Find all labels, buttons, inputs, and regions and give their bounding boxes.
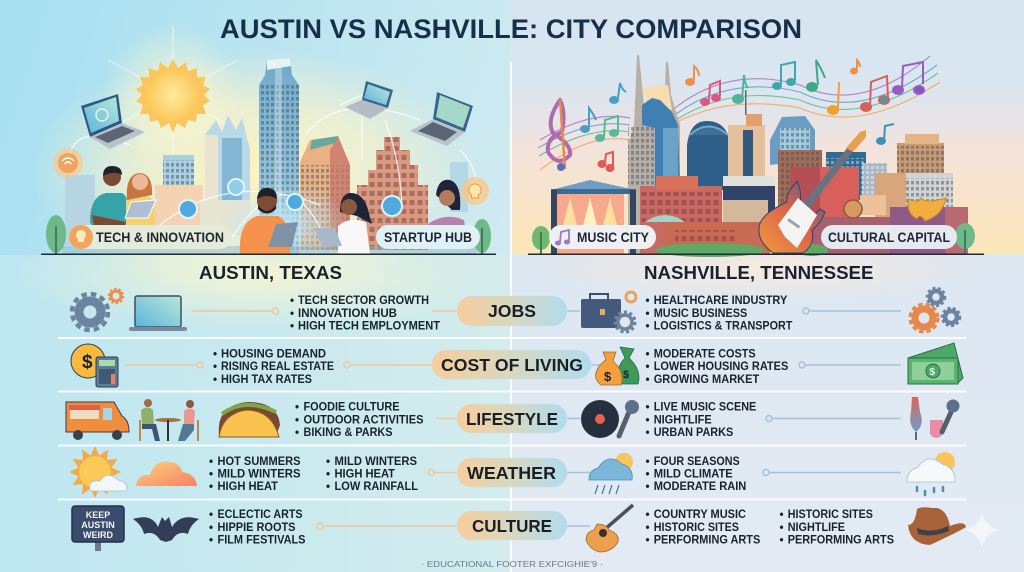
icon: acoustic guitar — [586, 505, 633, 552]
Austin cost of living list: HOUSING DEMAND — [221, 348, 326, 360]
tan tower — [728, 90, 765, 185]
Austin cost of living list: • — [213, 373, 217, 386]
icon: coin and calculator: $ — [82, 352, 93, 373]
person: man in teal shirt — [90, 166, 128, 228]
Nashville culture list two — [780, 508, 894, 546]
Austin jobs list: HIGH TECH EMPLOYMENT — [298, 320, 440, 332]
Austin lifestyle list — [295, 400, 424, 439]
Nashville jobs list: MUSIC BUSINESS — [654, 307, 748, 320]
Nashville jobs list: HEALTHCARE INDUSTRY — [654, 294, 788, 307]
icon: vinyl record and microphone — [581, 400, 639, 438]
pill: Jobs: JOBS — [488, 301, 536, 321]
Nashville culture list two: • — [780, 508, 784, 521]
concert stage — [551, 180, 636, 254]
icon: treble clef — [548, 100, 570, 171]
Austin weather list two: • — [326, 455, 330, 468]
Austin weather list two: • — [326, 480, 330, 493]
icon: Keep Austin Weird sign — [72, 506, 124, 551]
Nashville weather list: • — [646, 480, 650, 493]
tree right — [955, 223, 975, 254]
ground tint — [62, 246, 477, 254]
Austin culture list — [209, 508, 306, 546]
Nashville jobs list: • — [646, 307, 650, 320]
Austin jobs list: INNOVATION HUB — [298, 307, 397, 320]
dome building — [687, 121, 730, 190]
pill: Music City — [549, 225, 656, 249]
Austin jobs list: • — [290, 307, 294, 320]
panel: Austin skyline illustration — [46, 25, 491, 267]
Nashville lifestyle list: LIVE MUSIC SCENE — [654, 400, 757, 414]
Nashville cost of living list: • — [646, 360, 650, 373]
tall tan building — [897, 134, 944, 185]
network arcs — [68, 95, 477, 240]
peach office building — [300, 136, 350, 250]
background: Nashville sky — [511, 60, 1024, 254]
icon: three gears — [910, 288, 960, 332]
Nashville culture list two: NIGHTLIFE — [788, 521, 845, 534]
Nashville culture list two: HISTORIC SITES — [788, 508, 873, 521]
Nashville weather list — [646, 455, 746, 493]
Austin culture list: • — [209, 508, 213, 521]
Austin cost of living list: • — [213, 348, 217, 360]
tan low buildings — [860, 173, 953, 223]
icon: money bags: $ — [604, 369, 612, 384]
pill: Culture: CULTURE — [472, 516, 552, 536]
background: Nashville side — [511, 0, 1024, 572]
icon: rain cloud with sun — [589, 453, 633, 494]
connectors: Nashville side — [567, 308, 901, 526]
person: woman in pink top — [428, 180, 466, 232]
heading: Nashville, Tennessee: NASHVILLE, TENNESSEE — [644, 262, 874, 283]
background: Nashville heading glow — [530, 232, 990, 304]
pill: Lifestyle — [457, 404, 567, 433]
Austin jobs list: • — [290, 294, 294, 307]
person: woman in white blouse — [314, 193, 372, 254]
shrubs — [655, 243, 828, 257]
Austin weather list two: HIGH HEAT — [334, 468, 395, 480]
person: woman with tablet — [125, 173, 156, 226]
Nashville cost of living list: GROWING MARKET — [654, 373, 759, 386]
footer: · EDUCATIONAL FOOTER EXFCIGHIE'9 · — [421, 559, 603, 569]
Austin lifestyle list: • — [295, 400, 299, 414]
icon: coin and calculator — [71, 344, 118, 387]
glow behind network — [220, 183, 350, 267]
Austin weather list two — [326, 455, 418, 493]
Austin weather list one: MILD WINTERS — [218, 468, 301, 480]
icon: mask — [908, 198, 946, 221]
Austin culture list: ECLECTIC ARTS — [218, 508, 303, 521]
Austin weather list two: • — [326, 468, 330, 480]
connectors: Austin side — [125, 308, 457, 529]
pill: Tech & Innovation: TECH & INNOVATION — [96, 230, 224, 245]
brown building — [778, 150, 822, 215]
Nashville weather list: FOUR SEASONS — [654, 455, 740, 468]
Nashville lifestyle list: URBAN PARKS — [654, 426, 734, 439]
pill: Weather — [457, 458, 567, 487]
Nashville culture list two: PERFORMING ARTS — [788, 534, 894, 546]
Batman building — [628, 55, 680, 254]
title: AUSTIN VS NASHVILLE: CITY COMPARISON — [220, 14, 802, 44]
Nashville weather list: • — [646, 455, 650, 468]
sparkle — [964, 512, 1000, 548]
pill: Cultural Capital — [821, 225, 957, 249]
icon: glasses and microphone — [910, 397, 960, 440]
Austin cost of living list: • — [213, 360, 217, 373]
icon: food truck — [66, 402, 129, 440]
Nashville culture list one: HISTORIC SITES — [654, 521, 739, 534]
Nashville cost of living list: MODERATE COSTS — [654, 348, 756, 360]
Nashville jobs list: • — [646, 320, 650, 332]
icon: money bags: $ — [623, 369, 629, 381]
panel: Nashville skyline illustration — [532, 55, 975, 257]
Austin lifestyle list: OUTDOOR ACTIVITIES — [304, 414, 424, 426]
icon: laptop far right — [410, 92, 473, 146]
Austin cost of living list: RISING REAL ESTATE — [221, 360, 334, 373]
red brick buildings — [640, 167, 968, 254]
icon: cafe table with two people — [139, 399, 199, 441]
Nashville lifestyle list: • — [646, 426, 650, 439]
icon: orange cloud — [136, 462, 197, 486]
pill: Tech & Innovation — [69, 225, 232, 249]
Austin lifestyle list: FOODIE CULTURE — [304, 400, 400, 414]
Austin cost of living list: HIGH TAX RATES — [221, 373, 312, 386]
stepped brick building — [357, 137, 428, 250]
Nashville lifestyle list: • — [646, 400, 650, 414]
Austin cost of living list — [213, 348, 334, 386]
Austin weather list two: MILD WINTERS — [334, 455, 417, 468]
icon: sun — [103, 25, 243, 165]
pill: Startup Hub: STARTUP HUB — [384, 230, 472, 245]
music notes — [581, 60, 924, 171]
Nashville cost of living list: • — [646, 373, 650, 386]
Nashville culture list two: • — [780, 534, 784, 546]
Nashville weather list: MILD CLIMATE — [654, 468, 733, 480]
Nashville cost of living list — [646, 348, 789, 386]
Nashville culture list one: • — [646, 534, 650, 546]
pill: Music City: MUSIC CITY — [577, 230, 649, 245]
icon: gears — [72, 289, 123, 330]
icon: bat — [133, 517, 199, 542]
Nashville jobs list: LOGISTICS & TRANSPORT — [654, 320, 792, 332]
icon: laptop top right — [345, 81, 393, 119]
Austin weather list one: HIGH HEAT — [218, 480, 278, 493]
icon: money bags — [596, 347, 639, 385]
Austin weather list one: • — [209, 455, 213, 468]
Nashville weather list: • — [646, 468, 650, 480]
heading: Austin, Texas: AUSTIN, TEXAS — [199, 262, 342, 283]
grey building — [862, 163, 887, 203]
background buildings — [65, 115, 468, 245]
icon: stack of cash — [908, 343, 963, 384]
Austin weather list two: LOW RAINFALL — [334, 480, 418, 493]
Austin culture list: HIPPIE ROOTS — [218, 521, 296, 534]
icon: briefcase with gear — [581, 292, 636, 332]
pill: Lifestyle: LIFESTYLE — [466, 409, 558, 429]
icon: taco — [219, 402, 280, 437]
icon: film reel — [844, 200, 862, 218]
person: man in orange shirt — [240, 188, 298, 254]
tower — [259, 58, 299, 254]
pill: Cultural Capital: CULTURAL CAPITAL — [828, 230, 950, 245]
Austin weather list one: • — [209, 468, 213, 480]
Nashville culture list one: COUNTRY MUSIC — [654, 508, 747, 521]
icon: Keep Austin Weird sign: WEIRD — [83, 530, 113, 540]
Nashville lifestyle list: NIGHTLIFE — [654, 414, 712, 426]
Austin weather list one: HOT SUMMERS — [218, 455, 301, 468]
Nashville lifestyle list: • — [646, 414, 650, 426]
icon: Keep Austin Weird sign: KEEP — [86, 510, 110, 520]
tree left — [532, 226, 550, 254]
Nashville culture list two: • — [780, 521, 784, 534]
blue office building — [770, 116, 815, 165]
tree right — [473, 219, 491, 254]
Austin culture list: FILM FESTIVALS — [218, 534, 306, 546]
background: Austin heading glow — [10, 220, 510, 330]
separators — [58, 337, 966, 500]
network nodes — [179, 179, 402, 218]
Austin jobs list: TECH SECTOR GROWTH — [298, 294, 429, 307]
icon: white cloud with sun and drops — [907, 452, 955, 495]
Austin culture list: • — [209, 534, 213, 546]
pill: Jobs — [457, 296, 567, 326]
tree left — [46, 215, 66, 254]
Austin weather list one — [209, 455, 301, 493]
icon: laptop left — [81, 94, 145, 149]
icon: cowboy hat — [908, 507, 966, 545]
music staff waves — [538, 56, 940, 170]
Nashville culture list one — [646, 508, 761, 546]
icon: electric guitar — [759, 130, 866, 253]
Austin lifestyle list: • — [295, 426, 299, 439]
icon: wifi badge — [53, 148, 83, 178]
Nashville culture list one: • — [646, 521, 650, 534]
pill: Cost of Living: COST OF LIVING — [441, 355, 583, 375]
Nashville culture list one: PERFORMING ARTS — [654, 534, 761, 546]
pill: Startup Hub — [376, 225, 480, 249]
Nashville jobs list — [646, 294, 792, 332]
Nashville jobs list: • — [646, 294, 650, 307]
background: Austin glow — [30, 50, 480, 294]
icon: laptop — [129, 296, 187, 331]
pill: Culture — [457, 511, 567, 540]
Nashville cost of living list: • — [646, 348, 650, 360]
icon: light bulb badge — [461, 177, 489, 205]
background: Austin lower band — [0, 255, 511, 572]
blue glass building — [826, 152, 866, 200]
Austin lifestyle list: BIKING & PARKS — [304, 426, 393, 439]
Nashville cost of living list: LOWER HOUSING RATES — [654, 360, 789, 373]
icon: sun behind cloud — [69, 446, 127, 498]
Nashville culture list one: • — [646, 508, 650, 521]
Nashville lifestyle list — [646, 400, 757, 439]
Austin lifestyle list: • — [295, 414, 299, 426]
background: Austin side — [0, 0, 511, 572]
icon: stack of cash: $ — [930, 367, 936, 378]
icon: Keep Austin Weird sign: AUSTIN — [81, 520, 115, 530]
Austin jobs list: • — [290, 320, 294, 332]
Austin weather list one: • — [209, 480, 213, 493]
Austin jobs list — [290, 294, 440, 332]
Austin culture list: • — [209, 521, 213, 534]
Nashville weather list: MODERATE RAIN — [654, 480, 746, 493]
pill: Weather: WEATHER — [467, 463, 556, 483]
pill: Cost of Living — [432, 350, 591, 379]
